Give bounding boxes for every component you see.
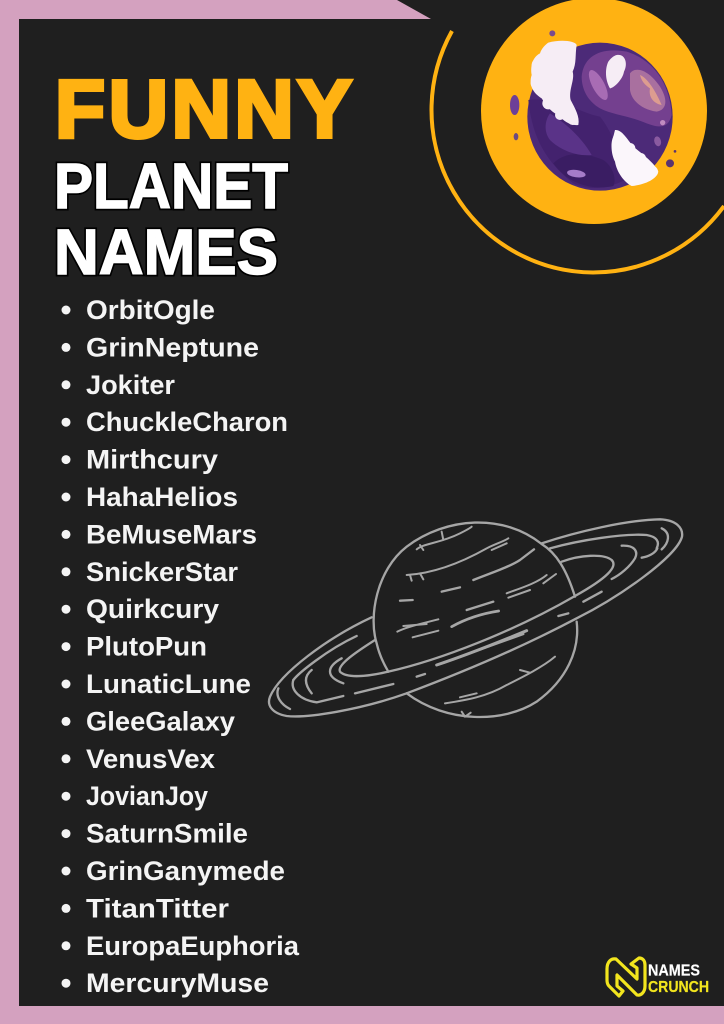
list of funny planet names: JovianJoy <box>86 781 208 811</box>
title: PLANET: PLANET <box>54 150 288 222</box>
list of funny planet names: Jokiter <box>86 370 175 400</box>
logo wordmark: CRUNCH: CRUNCH <box>648 979 709 996</box>
list of funny planet names: PlutoPun <box>86 632 207 662</box>
yellow sun disc <box>481 0 707 224</box>
list of funny planet names: HahaHelios <box>86 482 238 512</box>
list of funny planet names: BeMuseMars <box>86 519 257 549</box>
list of funny planet names: GrinGanymede <box>86 856 285 886</box>
list of funny planet names: LunaticLune <box>86 669 251 699</box>
list of funny planet names: MercuryMuse <box>86 968 269 998</box>
list of funny planet names: Quirkcury <box>86 594 219 624</box>
orbit ring <box>432 31 724 272</box>
icon: ringed planet outline <box>269 519 682 717</box>
clouds <box>531 41 626 125</box>
list of funny planet names: SnickerStar <box>86 557 238 587</box>
icon: purple planet with clouds <box>510 30 676 191</box>
logo: Names Crunch <box>607 958 709 996</box>
list of funny planet names: ChuckleCharon <box>86 407 288 437</box>
list of funny planet names: Mirthcury <box>86 445 218 475</box>
debris <box>549 30 555 36</box>
logo wordmark: NAMES: NAMES <box>648 962 700 980</box>
list of funny planet names: OrbitOgle <box>86 295 215 325</box>
list of funny planet names: GrinNeptune <box>86 332 259 362</box>
title: NAMES: NAMES <box>54 216 278 288</box>
title: FUNNY: FUNNY <box>55 64 352 155</box>
list of funny planet names: VenusVex <box>86 744 215 774</box>
title: PLANET: PLANET <box>54 150 288 222</box>
list of funny planet names: SaturnSmile <box>86 819 248 849</box>
icon: logo N mark <box>607 958 645 996</box>
list of funny planet names: EuropaEuphoria <box>86 931 300 961</box>
list of funny planet names <box>62 295 300 998</box>
list of funny planet names: GleeGalaxy <box>86 706 235 736</box>
list of funny planet names: TitanTitter <box>86 893 230 923</box>
title: NAMES: NAMES <box>54 216 278 288</box>
